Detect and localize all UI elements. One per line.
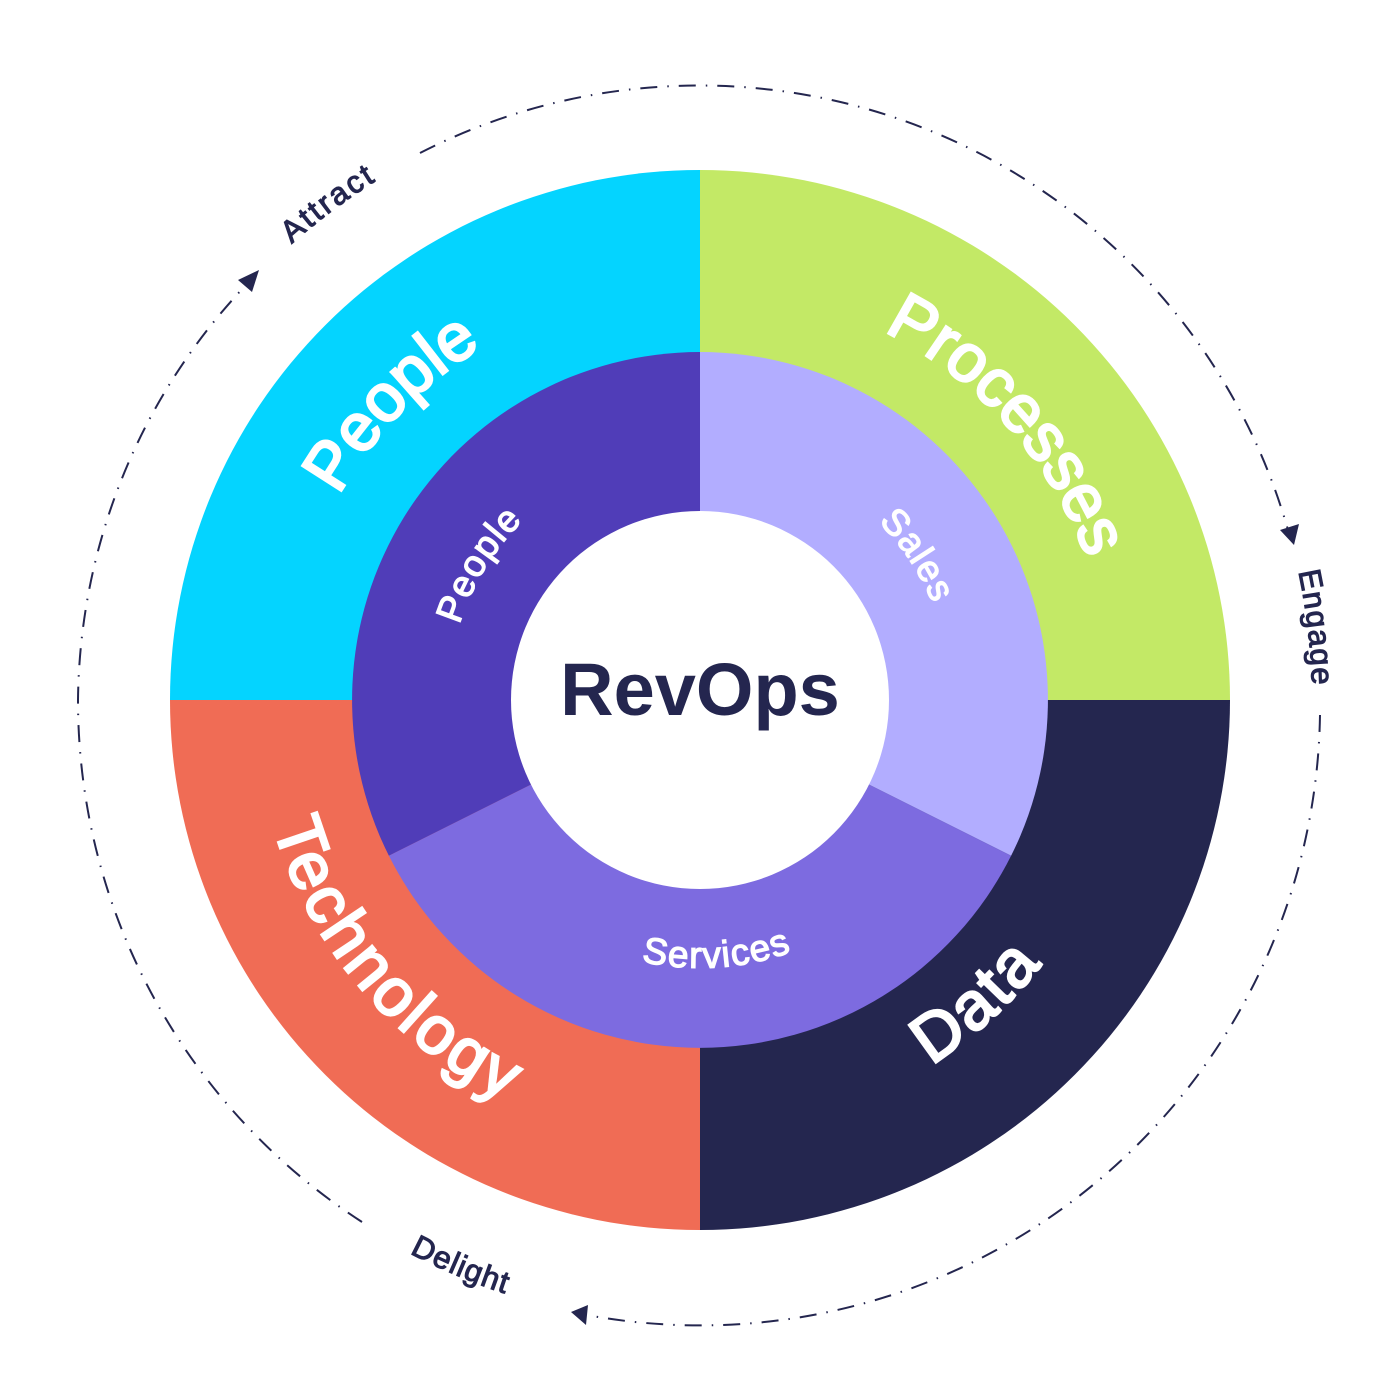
label: Engage: Engage	[1298, 569, 1329, 684]
label: Attract: Attract	[284, 165, 376, 245]
segment: Sales	[700, 352, 1048, 856]
label: outer People: People	[300, 322, 476, 492]
label: Data: Data	[907, 948, 1044, 1064]
segment: Services	[389, 700, 1011, 1048]
panel: inner ring	[352, 352, 1048, 1048]
segment: Processes	[700, 170, 1230, 700]
arrow: Engage to Delight	[571, 715, 1320, 1325]
segment: inner People	[352, 352, 700, 856]
label: Services: Services	[643, 934, 790, 968]
label: inner People: People	[436, 511, 520, 623]
label: Sales: Sales	[882, 508, 949, 601]
arrow: Delight to Attract	[78, 270, 362, 1222]
segment: People	[170, 170, 700, 700]
arrow: Attract to Engage	[420, 86, 1299, 545]
segment: Technology	[170, 700, 700, 1230]
center circle	[511, 511, 889, 889]
label: Delight: Delight	[411, 1234, 510, 1294]
label: Processes: Processes	[886, 292, 1118, 555]
segment: Data	[700, 700, 1230, 1230]
label: Technology: Technology	[276, 810, 524, 1103]
panel: outer ring	[170, 170, 1230, 1230]
title: RevOps: RevOps	[560, 648, 840, 731]
